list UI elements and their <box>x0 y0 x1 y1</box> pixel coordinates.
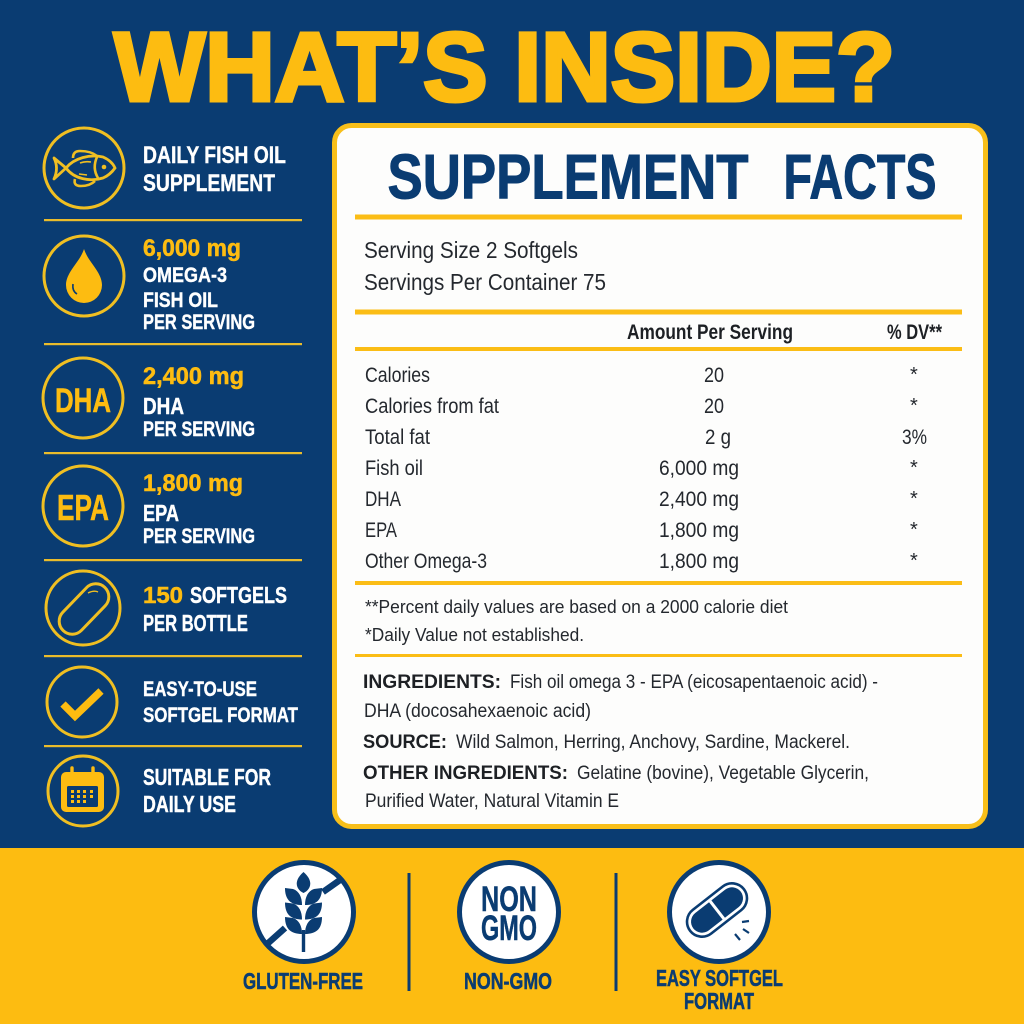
text: suitable for daily use <box>143 764 271 817</box>
text: easy-to-use softgel format: EASY-TO-USE <box>143 677 257 701</box>
text: source: SOURCE: <box>363 731 447 753</box>
icon: check mark <box>47 667 117 737</box>
table: nutrient rows: DHA <box>365 487 402 511</box>
text: ingredients: DHA (docosahexaenoic acid) <box>364 701 591 722</box>
table: nutrient rows: 3% <box>902 425 927 449</box>
text: 150 softgels per bottle: PER BOTTLE <box>143 610 248 636</box>
icon: EPA badge: EPA <box>57 487 109 528</box>
text: suitable for daily use: DAILY USE <box>143 791 236 817</box>
text: 2,400 mg DHA: PER SERVING <box>143 416 255 441</box>
table header: % DV** <box>887 321 943 344</box>
text: ingredients: Fish oil omega 3 - EPA (eicosapentaenoic acid) - <box>510 672 878 693</box>
icon: oil drop <box>44 236 124 316</box>
text: other ingredients: OTHER INGREDIENTS: <box>363 762 568 784</box>
icon: non-GMO: NON <box>481 880 537 919</box>
icon: DHA badge: DHA <box>55 382 111 420</box>
table: nutrient rows: 1,800 mg <box>659 549 739 573</box>
text: 6,000 mg omega-3: 6,000 mg <box>143 236 241 262</box>
panel: bottom badges band <box>0 848 1024 1024</box>
table header <box>627 321 943 344</box>
text: ingredients <box>363 671 878 722</box>
table: nutrient rows: 6,000 mg <box>659 456 739 480</box>
text: 2,400 mg DHA: 2,400 mg <box>143 364 244 390</box>
icon: gluten-free <box>254 862 354 962</box>
heading: supplement facts: FACTS <box>784 142 936 212</box>
text: 1,800 mg EPA: PER SERVING <box>143 523 255 548</box>
text: daily fish oil supplement: SUPPLEMENT <box>143 171 275 197</box>
label: non-GMO: NON-GMO <box>464 968 552 994</box>
text: 150 softgels per bottle <box>143 582 287 636</box>
text: 6,000 mg omega-3 <box>143 236 255 334</box>
table: nutrient rows: Other Omega-3 <box>365 549 487 573</box>
table header: Amount Per Serving <box>627 321 793 344</box>
label: easy softgel format: EASY SOFTGEL <box>656 965 783 991</box>
text: 6,000 mg omega-3: FISH OIL <box>143 289 218 312</box>
text: 1,800 mg EPA: EPA <box>143 500 179 526</box>
icon: fish <box>44 128 124 208</box>
text: 6,000 mg omega-3: PER SERVING <box>143 309 255 334</box>
label: gluten-free: GLUTEN-FREE <box>243 968 363 994</box>
table: nutrient rows: * <box>910 395 918 417</box>
text: 150 softgels per bottle: SOFTGELS <box>190 582 287 608</box>
heading: supplement facts: SUPPLEMENT <box>388 142 748 212</box>
panel: benefits list <box>43 128 302 826</box>
table: nutrient rows: * <box>910 488 918 510</box>
text: footnotes: *Daily Value not established. <box>365 624 584 645</box>
table: nutrient rows: * <box>910 550 918 572</box>
text: 150 softgels per bottle: 150 <box>143 582 183 608</box>
text: footnotes: **Percent daily values are based on a 2000 calorie diet <box>365 596 788 617</box>
table: nutrient rows: 2 g <box>705 425 731 449</box>
table: nutrient rows: Calories from fat <box>365 394 499 418</box>
panel: supplement facts <box>334 126 986 826</box>
text: easy-to-use softgel format: SOFTGEL FORMAT <box>143 703 298 727</box>
icon: calendar <box>48 756 118 826</box>
icon: softgel <box>46 571 120 645</box>
table: nutrient rows: * <box>910 364 918 386</box>
icon: non-GMO: GMO <box>481 909 537 948</box>
label: easy softgel format <box>656 965 783 1014</box>
table: nutrient rows: 20 <box>704 394 724 418</box>
text: source: Wild Salmon, Herring, Anchovy, Sardine, Mackerel. <box>456 732 850 753</box>
text: easy-to-use softgel format <box>143 677 298 727</box>
icon: EPA badge <box>43 466 123 546</box>
text: daily fish oil supplement: DAILY FISH OIL <box>143 143 286 169</box>
text: other ingredients <box>363 762 869 812</box>
table: nutrient rows: Total fat <box>365 425 430 449</box>
text: daily fish oil supplement <box>143 143 286 197</box>
table: nutrient rows: 2,400 mg <box>659 487 739 511</box>
label: easy softgel format: FORMAT <box>684 988 754 1014</box>
table: nutrient rows: * <box>910 457 918 479</box>
text: footnotes <box>365 596 788 645</box>
text: 2,400 mg DHA <box>143 364 255 441</box>
text: serving information <box>364 237 606 295</box>
text: 2,400 mg DHA: DHA <box>143 393 184 419</box>
table: nutrient rows: Fish oil <box>365 456 423 480</box>
text: other ingredients: Gelatine (bovine), Vegetable Glycerin, <box>577 763 869 784</box>
text: suitable for daily use: SUITABLE FOR <box>143 764 271 790</box>
text: serving information: Serving Size 2 Softgels <box>364 237 578 263</box>
icon: easy softgel <box>670 862 768 962</box>
table: nutrient rows: 1,800 mg <box>659 518 739 542</box>
text: ingredients: INGREDIENTS: <box>363 671 501 693</box>
text: serving information: Servings Per Container 75 <box>364 269 606 295</box>
text: 6,000 mg omega-3: OMEGA-3 <box>143 264 227 287</box>
title: WHAT’S INSIDE? <box>114 12 895 122</box>
text: other ingredients: Purified Water, Natural Vitamin E <box>365 790 619 812</box>
icon: non-GMO <box>460 862 558 962</box>
table: nutrient rows: * <box>910 519 918 541</box>
table: nutrient rows: 20 <box>704 363 724 387</box>
text: 1,800 mg EPA <box>143 471 255 548</box>
text: 1,800 mg EPA: 1,800 mg <box>143 471 243 497</box>
table: nutrient rows: EPA <box>365 518 398 542</box>
table: nutrient rows: Calories <box>365 363 430 387</box>
table: nutrient rows <box>365 363 927 573</box>
icon: DHA badge <box>43 358 123 438</box>
